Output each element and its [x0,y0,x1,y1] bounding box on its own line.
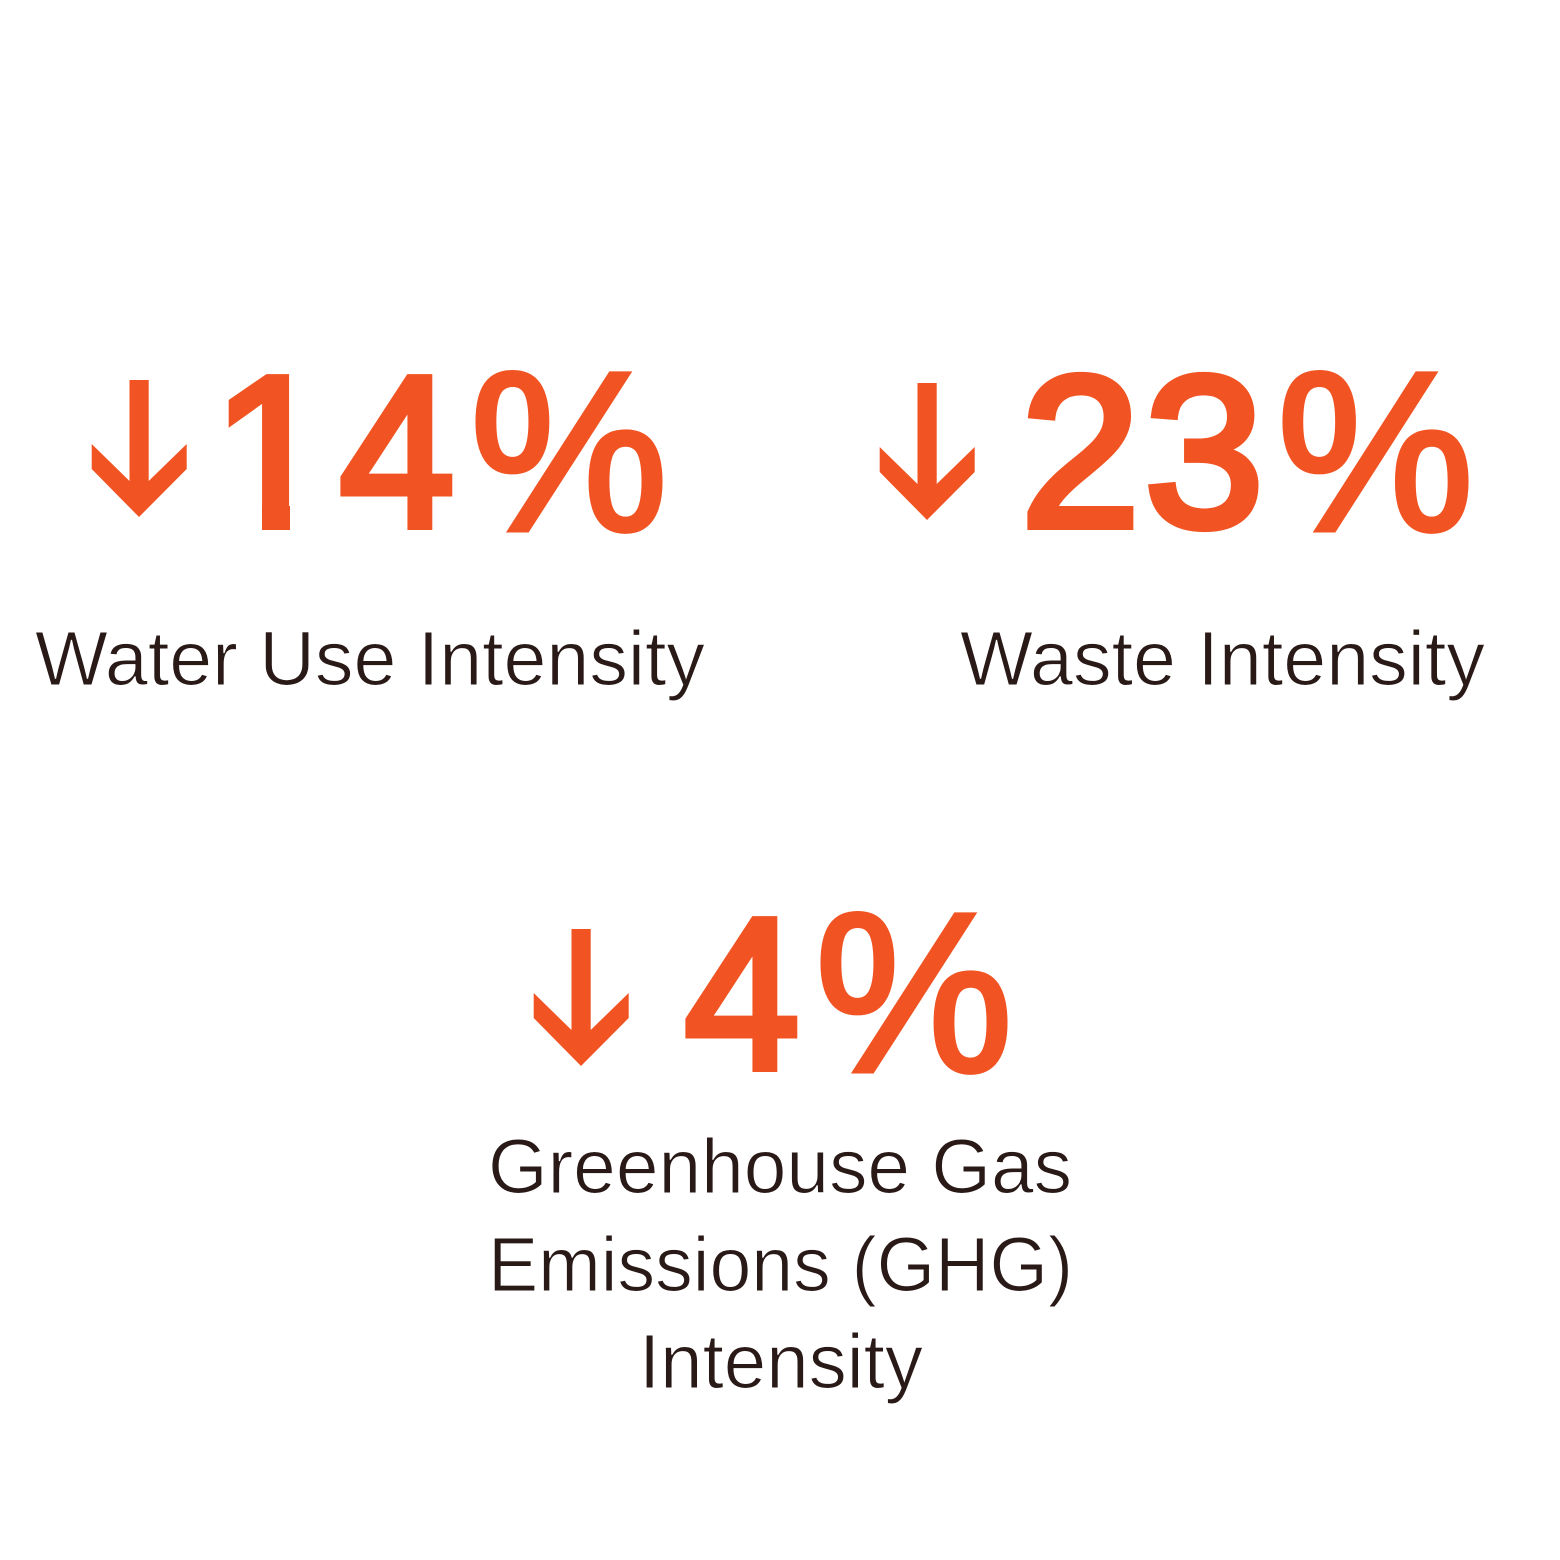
number: 23% [1021,326,1474,579]
label: greenhouse gas emissions (ghg) intensity: Intensity [639,1319,923,1405]
panel: water use intensity [36,370,704,700]
number: 23%: 3 [1144,331,1264,572]
icon: down arrow water [92,380,187,517]
label: greenhouse gas emissions (ghg) intensity [488,1124,1073,1405]
number: 14% [228,370,662,534]
number: 14%: 1 [212,331,332,572]
panel: greenhouse gas emissions intensity [488,867,1073,1405]
icon: down arrow waste [880,383,975,520]
label: water use intensity: Water Use Intensity [35,616,705,702]
label: waste intensity: Waste Intensity [960,616,1485,702]
number: 14%: % [470,326,668,579]
number: 4%: 4 [684,873,800,1114]
label: greenhouse gas emissions (ghg) intensity: Emissions (GHG) [488,1222,1073,1308]
number: 14%: 4 [340,331,454,572]
icon: down arrow ghg [534,929,629,1066]
label: greenhouse gas emissions (ghg) intensity: Greenhouse Gas [488,1124,1072,1210]
number: 4% [684,867,1013,1120]
number: 23%: 2 [1021,331,1140,572]
number: 4%: % [815,867,1013,1120]
number: 23%: % [1277,326,1474,579]
panel: waste intensity [880,326,1485,702]
